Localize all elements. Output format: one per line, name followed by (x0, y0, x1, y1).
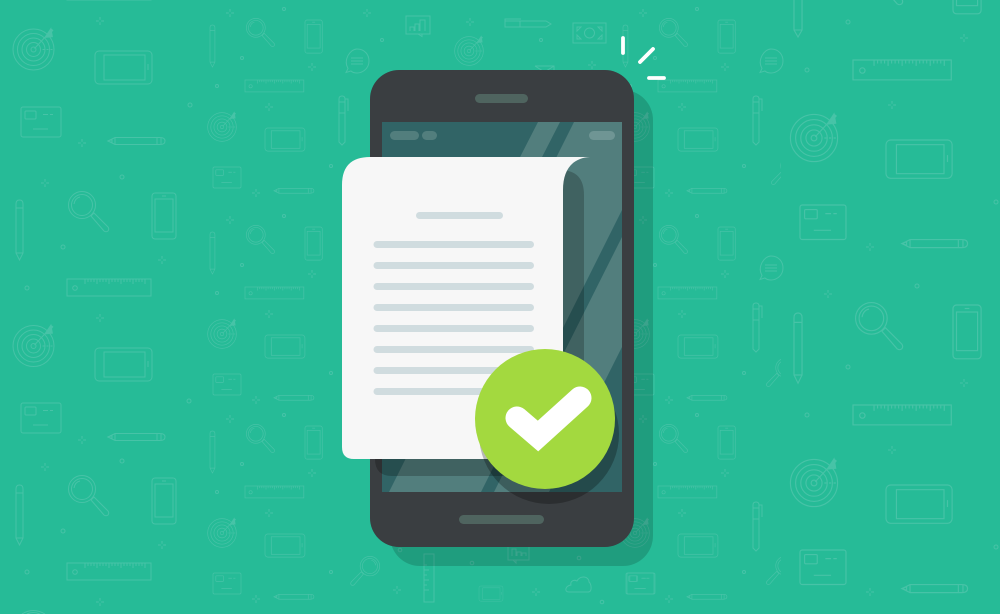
notification sparks (623, 38, 664, 78)
pattern: small icons right column (339, 8, 800, 603)
pattern: large icons left (13, 0, 192, 614)
phone screen (382, 122, 622, 492)
check badge shadow (479, 364, 619, 504)
check mark (517, 398, 580, 436)
screen light reflections (389, 122, 622, 492)
document (342, 157, 590, 459)
green circle (475, 349, 615, 489)
document text lines (374, 241, 534, 395)
pattern: small icons left column (208, 8, 332, 603)
paper sheet with curled corner (342, 157, 590, 459)
phone drop shadow (390, 90, 653, 566)
pattern: icons around the phone (351, 9, 655, 604)
document title line (416, 212, 503, 219)
document shadow (375, 170, 584, 476)
phone (370, 70, 634, 547)
check badge (475, 349, 615, 489)
phone speaker (475, 94, 528, 103)
phone home button (459, 515, 544, 524)
phone body (370, 70, 634, 547)
pattern: large icons right (790, 0, 998, 596)
screen status pills (390, 131, 615, 140)
